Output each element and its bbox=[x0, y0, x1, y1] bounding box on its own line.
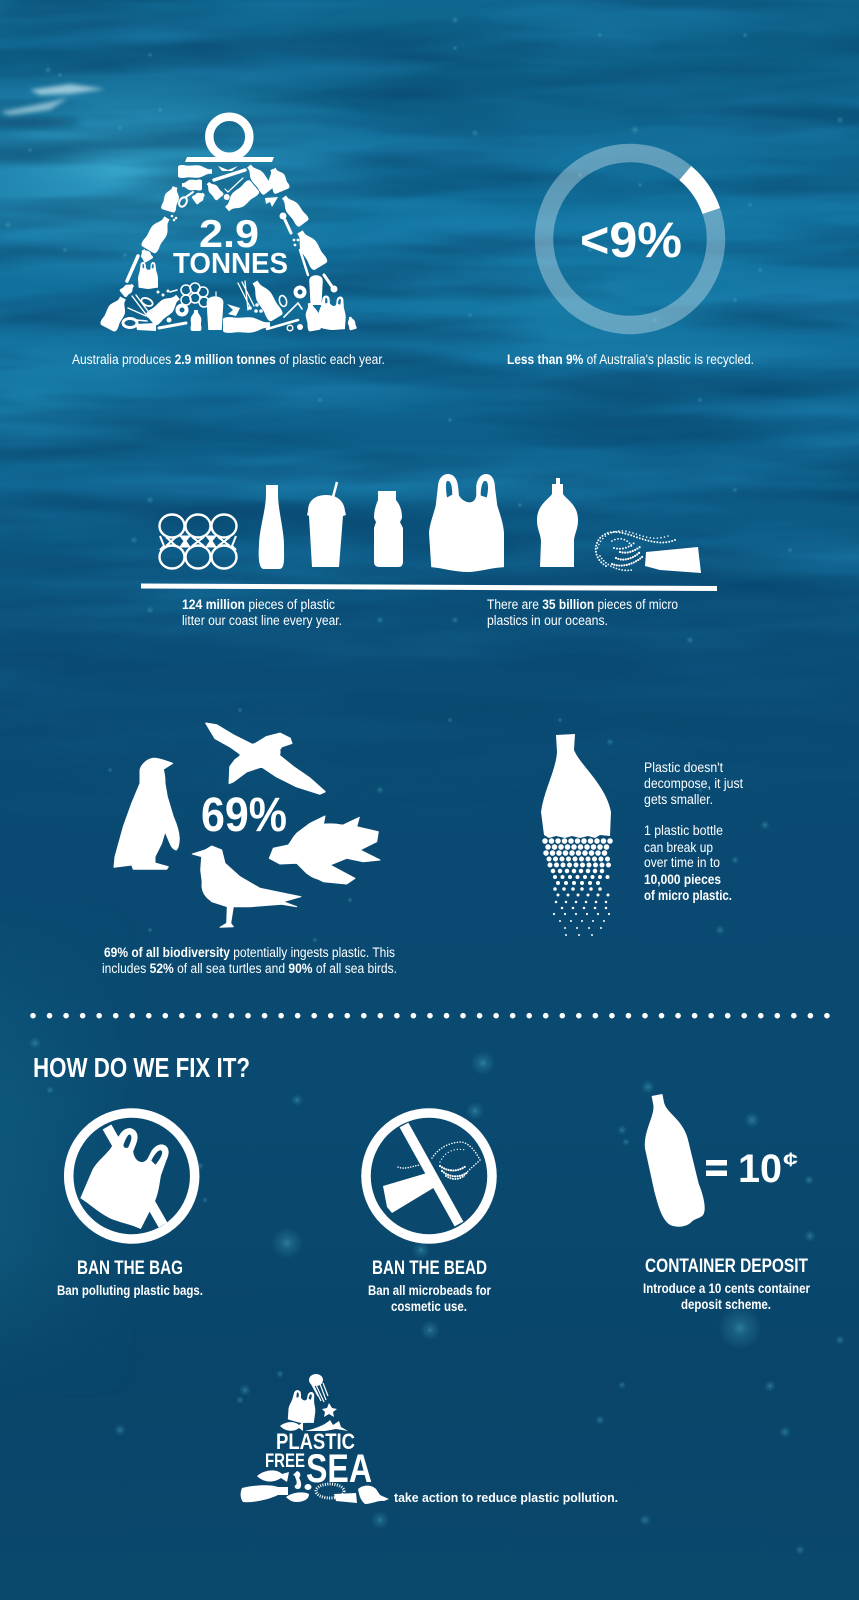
icon: prohibited microbeads bbox=[366, 1113, 492, 1239]
caption: 124 million pieces: litter our coast line every year. bbox=[182, 613, 342, 628]
caption: 35 billion pieces bbox=[487, 597, 678, 628]
2.9 tonnes figure: TONNES bbox=[173, 248, 288, 280]
heading: ban the bead: BAN THE BEAD bbox=[372, 1257, 487, 1279]
chart: recycling ring bbox=[544, 153, 716, 325]
figure: 10 cents: ¢ bbox=[783, 1150, 799, 1171]
icon: penguin bbox=[114, 758, 179, 869]
tagline: take action to reduce plastic pollution. bbox=[394, 1490, 618, 1505]
caption: 35 billion pieces: plastics in our oceans. bbox=[487, 613, 608, 628]
text: ban polluting bags: Ban polluting plastic bags. bbox=[57, 1283, 203, 1298]
figure: 10 cents: 10 bbox=[738, 1147, 782, 1191]
heading: ban the bag: BAN THE BAG bbox=[77, 1257, 183, 1279]
2.9 tonnes figure: 2.9 bbox=[199, 213, 259, 256]
text: plastic doesn't decompose: decompose, it just bbox=[644, 776, 743, 791]
icon: microbeads spilling from tube bbox=[596, 531, 675, 570]
icon: drink bottle bbox=[259, 485, 284, 569]
panel: plastic breaking down bbox=[541, 734, 743, 935]
icon: small bottle bbox=[374, 491, 403, 567]
icon: sea turtle bbox=[269, 816, 380, 884]
icon: six-pack rings bbox=[160, 514, 236, 568]
panel: ban the bag bbox=[57, 1113, 203, 1298]
2.9 tonnes figure bbox=[173, 213, 288, 280]
panel: biodiversity ingesting plastic bbox=[102, 723, 397, 976]
text: plastic doesn't decompose: Plastic doesn't bbox=[644, 760, 723, 775]
text: deposit scheme bbox=[643, 1281, 811, 1312]
logo: plastic free sea bbox=[241, 1374, 618, 1505]
caption: recycled: Less than 9% of Australia's plastic is recycled. bbox=[507, 352, 754, 367]
text: plastic doesn't decompose: 1 plastic bottle bbox=[644, 823, 723, 838]
caption: 124 million pieces: 124 million pieces of plastic bbox=[182, 597, 335, 612]
icon: takeaway cup with straw bbox=[307, 482, 346, 567]
panel: recycling rate bbox=[507, 153, 754, 367]
icon: seagull bbox=[192, 846, 301, 927]
panel: 2.9 tonnes of plastic bbox=[72, 117, 385, 367]
text: plastic doesn't decompose: of micro plastic. bbox=[644, 888, 732, 903]
icon: PET bottle bbox=[635, 1090, 708, 1231]
figure: less than 9%: <9% bbox=[580, 212, 682, 268]
logo wordmark: PLASTIC bbox=[276, 1429, 355, 1454]
logo wordmark: SEA bbox=[306, 1447, 372, 1491]
icon: toothpaste tube bbox=[645, 547, 701, 573]
logo wordmark bbox=[265, 1429, 372, 1491]
text: plastic doesn't decompose: can break up bbox=[644, 840, 713, 855]
icon: plastic bag bbox=[429, 474, 504, 572]
text: ban microbeads: cosmetic use. bbox=[391, 1299, 467, 1314]
caption: 124 million pieces bbox=[182, 597, 342, 628]
caption: 35 billion pieces: There are 35 billion pieces of micro bbox=[487, 597, 678, 612]
dotted divider bbox=[33, 1013, 827, 1019]
text: plastic doesn't decompose: 10,000 pieces bbox=[644, 872, 721, 887]
panel: litter on the coast line bbox=[141, 474, 717, 628]
logo wordmark: FREE bbox=[265, 1451, 305, 1472]
figure: 69%: 69% bbox=[201, 789, 287, 842]
heading: how do we fix it: HOW DO WE FIX IT? bbox=[33, 1052, 250, 1083]
icon: prohibited plastic bag bbox=[69, 1113, 195, 1239]
text: ban microbeads: Ban all microbeads for bbox=[368, 1283, 492, 1298]
text: ban microbeads bbox=[368, 1283, 492, 1314]
icon: flying seabird bbox=[206, 723, 325, 794]
text: plastic doesn't decompose: over time in to bbox=[644, 855, 720, 870]
panel: container deposit bbox=[635, 1090, 811, 1312]
heading: container deposit: CONTAINER DEPOSIT bbox=[645, 1255, 808, 1277]
text: plastic doesn't decompose bbox=[644, 760, 743, 903]
panel: ban the bead bbox=[366, 1113, 492, 1314]
caption: biodiversity bbox=[102, 945, 397, 976]
icon: equals sign bbox=[706, 1160, 727, 1176]
caption: biodiversity: 69% of all biodiversity potentially ingests plastic. This bbox=[104, 945, 395, 960]
text: plastic doesn't decompose: gets smaller. bbox=[644, 792, 713, 807]
logo marine life pile bbox=[241, 1374, 389, 1504]
text: deposit scheme: Introduce a 10 cents container bbox=[643, 1281, 811, 1296]
icon: bottle dissolving into micro plastic bbox=[541, 734, 613, 935]
caption: biodiversity: includes 52% of all sea turtles and 90% of all sea birds. bbox=[102, 961, 397, 976]
baseline rule bbox=[141, 584, 717, 591]
icon: weight made of plastic rubbish bbox=[99, 117, 357, 333]
icon: detergent bottle bbox=[537, 478, 578, 567]
text: deposit scheme: deposit scheme. bbox=[681, 1297, 771, 1312]
caption: 2.9 million tonnes: Australia produces 2.9 million tonnes of plastic each year. bbox=[72, 352, 385, 367]
